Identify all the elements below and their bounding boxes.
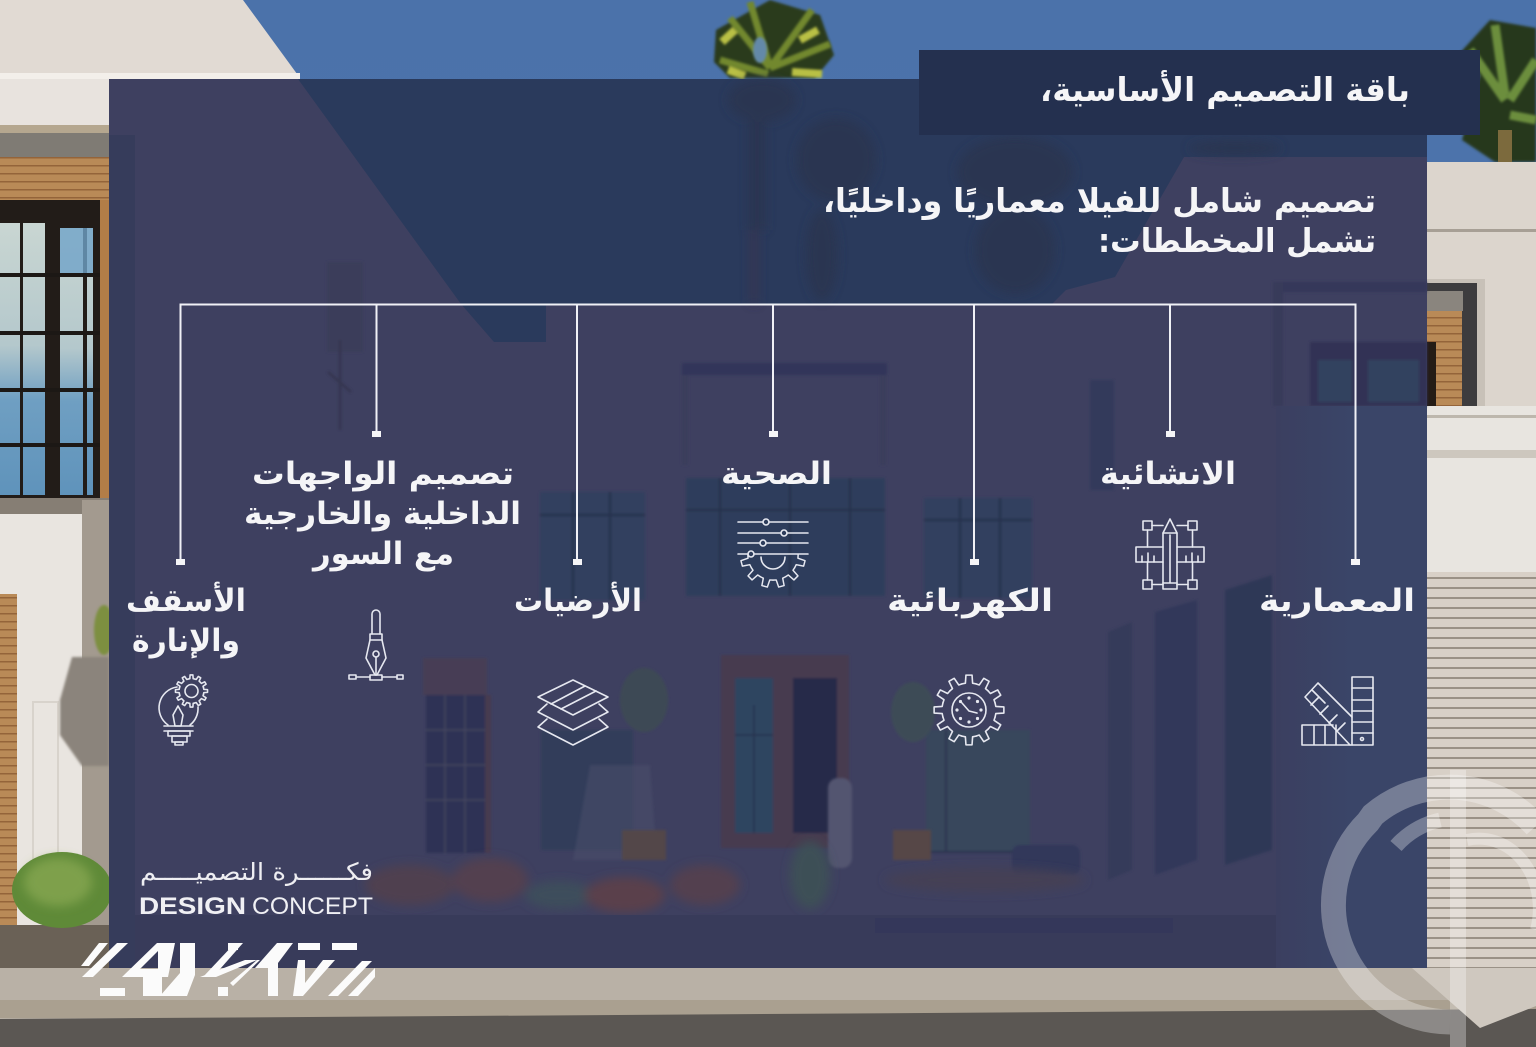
intro text	[823, 181, 1376, 260]
item: facades design	[244, 456, 521, 680]
brand name latin	[139, 893, 373, 920]
icon: pen tool	[349, 610, 403, 680]
item: flooring	[514, 581, 642, 745]
left dark column	[109, 135, 135, 968]
label: والإنارة	[132, 623, 240, 659]
connector tree	[176, 304, 1360, 565]
item: architectural	[1259, 583, 1415, 745]
label: تصميم الواجهات	[252, 456, 514, 492]
icon: layers	[538, 680, 608, 745]
label	[126, 581, 246, 659]
label: الكهربائية	[887, 583, 1053, 619]
item: ceilings and lighting	[126, 581, 246, 745]
brand mark	[81, 943, 375, 996]
brand name arabic: فكــــــرة التصميـــــم	[140, 858, 373, 886]
icon: colour swatches	[1302, 677, 1373, 745]
watermark logo: circular D	[1333, 770, 1536, 1047]
banner title: باقة التصميم الأساسية،	[1040, 69, 1410, 109]
header banner	[919, 50, 1480, 135]
left building	[0, 0, 300, 968]
label: الأسقف	[126, 581, 246, 619]
label: الداخلية والخارجية	[244, 496, 521, 532]
intro text: تشمل المخططات:	[1098, 221, 1376, 260]
icon: pencil and ruler	[1136, 519, 1204, 589]
brand name latin: DESIGN	[139, 893, 246, 920]
label: المعمارية	[1259, 583, 1415, 619]
item: plumbing	[721, 456, 832, 588]
icon: sliders and gear	[738, 519, 808, 588]
brand logo	[81, 858, 375, 996]
label: مع السور	[311, 536, 454, 572]
lower right bluish wall	[1276, 406, 1427, 968]
ground and steps	[135, 915, 1276, 968]
palm trees	[714, 0, 1536, 162]
label: الصحية	[721, 456, 832, 492]
icon: bulb with gear	[159, 675, 208, 745]
label: الأرضيات	[514, 581, 642, 619]
windows	[423, 478, 1272, 880]
label	[244, 456, 521, 572]
icon: gear with clock	[934, 675, 1004, 745]
label: الانشائية	[1100, 456, 1236, 492]
dark sky area	[298, 79, 1427, 342]
courtyard figures and plants	[365, 668, 1085, 913]
brand name latin: CONCEPT	[252, 893, 373, 920]
right building	[1427, 162, 1536, 972]
entrance door	[721, 655, 849, 848]
item: structural	[1100, 456, 1236, 589]
pavement and road	[0, 968, 1536, 1047]
translucent navy panel with muted facade	[109, 78, 1427, 968]
faint palm shadows	[728, 78, 1281, 304]
intro text: تصميم شامل للفيلا معماريًا وداخليًا،	[823, 181, 1376, 221]
facade shadows	[327, 262, 1427, 490]
item: electrical	[887, 583, 1053, 745]
